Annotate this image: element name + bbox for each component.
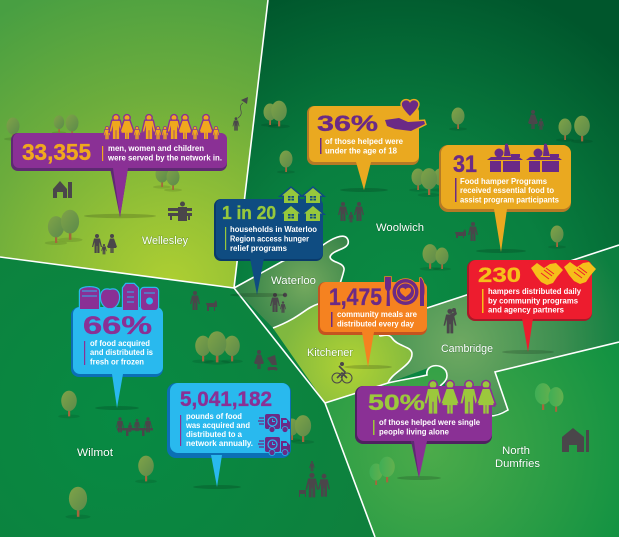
icon: woman with stroller (254, 350, 278, 370)
label: Cambridge: Cambridge (441, 343, 493, 355)
label: North Dumfries: Dumfries (495, 458, 541, 470)
region: Cambridge (380, 245, 619, 416)
icon: family Woolwich (338, 202, 364, 222)
place labels (77, 222, 541, 470)
description: households in Waterloo (230, 224, 317, 234)
icon: hamper boxes (487, 144, 562, 172)
icon: four houses (282, 188, 322, 221)
stat number: 230 (478, 264, 521, 287)
icon: barn North Dumfries (562, 428, 589, 452)
icon: four figures (424, 381, 494, 414)
description: under the age of 18 (325, 146, 397, 156)
label: Waterloo: Waterloo (271, 275, 316, 287)
label: Wilmot: Wilmot (77, 447, 113, 459)
icon: kite runner (232, 97, 248, 131)
stat number: 50% (368, 390, 425, 415)
description: pounds of food (186, 411, 242, 421)
callout: 1,475 community meals (318, 277, 427, 367)
icon: cyclist (332, 362, 352, 383)
icon: handshakes (531, 262, 596, 285)
label: North Dumfries: North (502, 445, 530, 457)
stat number: 1,475 (329, 284, 382, 311)
callout: 36% under 18 (307, 100, 425, 190)
description: community meals are (337, 309, 417, 319)
icon: plate with fork and knife (385, 277, 425, 306)
stat number: 66% (83, 312, 152, 340)
callout: 230 hampers daily (467, 260, 596, 352)
icon: dog walker Woolwich (455, 222, 478, 241)
icon: food items (80, 284, 158, 310)
description: by community programs (488, 296, 578, 306)
callout: 33,355 people served (11, 115, 227, 217)
callout: 5,041,182 pounds of food (167, 383, 291, 487)
icon: bench (168, 202, 192, 221)
description: fresh or frozen (90, 356, 144, 366)
description: was acquired and (185, 420, 250, 430)
region: Waterloo (234, 236, 348, 328)
description: were served by the network in. (107, 152, 222, 162)
ground shadows under pins (84, 188, 554, 489)
trees (4, 101, 593, 519)
description: of those helped were single (379, 417, 480, 427)
stat number: 1 in 20 (222, 203, 276, 223)
icon: picnic table (116, 417, 153, 436)
description: and distributed is (90, 347, 153, 357)
callout: 31 food hamper programs (439, 144, 571, 252)
description: men, women and children (108, 143, 204, 153)
icon: barn Wellesley (53, 181, 72, 198)
stat number: 36% (317, 111, 378, 136)
stat number: 5,041,182 (180, 388, 272, 411)
callout: 50% living alone (355, 381, 494, 478)
description: received essential food to (460, 185, 554, 195)
icon: family Wellesley (92, 234, 117, 254)
callout: 1 in 20 households (214, 188, 323, 295)
stat number: 31 (453, 151, 477, 178)
people and object icons (53, 97, 589, 497)
icon: woman and child (528, 110, 544, 130)
description: Region access hunger (230, 234, 310, 244)
description: distributed every day (337, 318, 414, 328)
icon: hand holding heart (385, 100, 425, 131)
description: distributed to a (186, 429, 242, 439)
icon: father and child (444, 308, 457, 333)
description: of food acquired (90, 338, 150, 348)
description: of those helped were (325, 136, 403, 146)
icon: family Waterloo (270, 293, 287, 313)
label: Kitchener: Kitchener (307, 347, 353, 359)
label: Woolwich: Woolwich (376, 222, 424, 234)
description: Food hamper Programs (460, 176, 547, 186)
icon: row of people (104, 115, 219, 139)
region: Kitchener (273, 290, 412, 403)
region: Wellesley (0, 0, 268, 288)
icon: dog walker Wilmot (190, 291, 217, 311)
description: hampers distributed daily (488, 286, 581, 296)
description: network annually. (186, 438, 253, 448)
description: relief programs (230, 243, 287, 253)
description: assist program participants (460, 194, 559, 204)
description: and agency partners (488, 304, 564, 314)
label: Wellesley: Wellesley (142, 235, 188, 247)
region: North Dumfries (325, 342, 619, 537)
callout: 66% fresh or frozen (71, 284, 163, 408)
region: Wilmot (0, 257, 375, 537)
stat number: 33,355 (22, 139, 91, 165)
description: people living alone (379, 426, 449, 436)
icon: parent with child on shoulders (299, 461, 330, 497)
icon: delivery trucks (258, 414, 290, 456)
